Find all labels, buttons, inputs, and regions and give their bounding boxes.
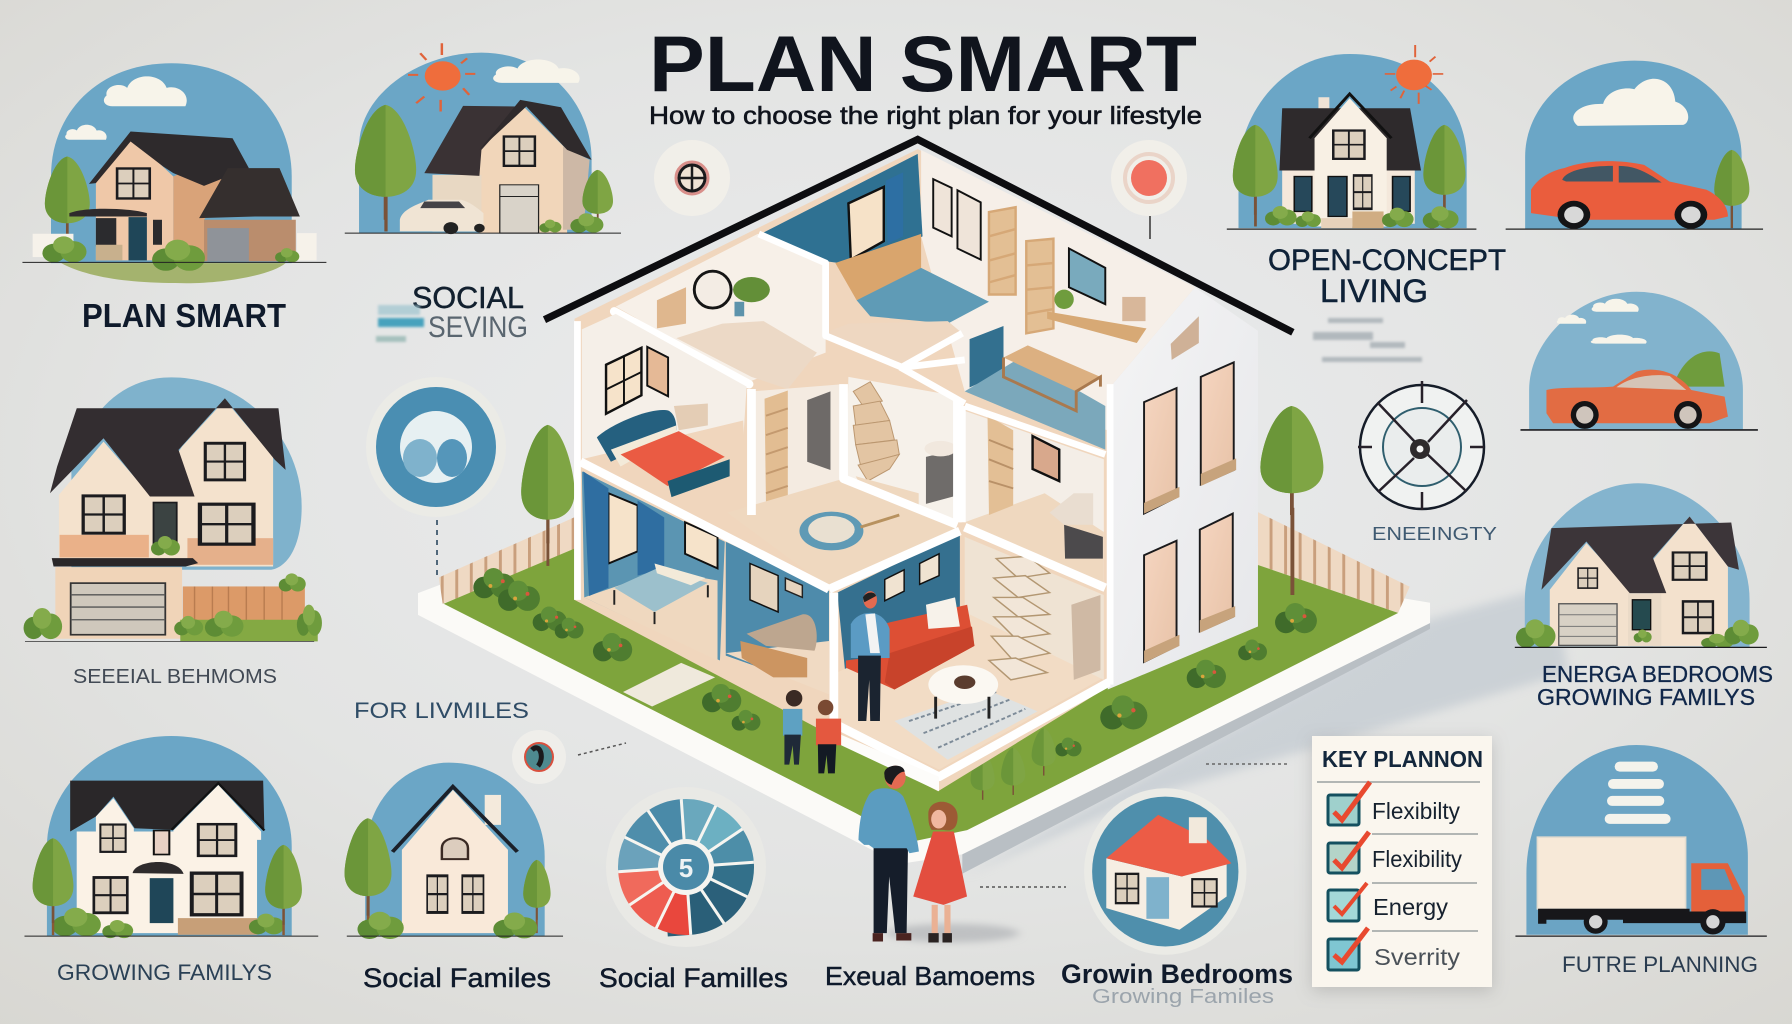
car body xyxy=(1531,161,1728,220)
house base xyxy=(575,149,1195,791)
panel: Plan Smart house xyxy=(22,63,326,283)
walls xyxy=(1550,517,1728,646)
garage side xyxy=(432,175,481,231)
porch shrub xyxy=(151,536,180,555)
night table xyxy=(674,404,708,430)
window xyxy=(504,137,535,166)
arched window xyxy=(442,838,468,859)
icon: energy dial xyxy=(1358,381,1484,510)
gables xyxy=(96,783,264,840)
pictures xyxy=(885,554,939,601)
icon: segmented wheel: 5 xyxy=(679,853,693,883)
label: living: LIVING xyxy=(1320,273,1428,309)
middle floor centre rooms xyxy=(727,377,960,588)
label: social familes: Social Familes xyxy=(363,963,551,993)
roof xyxy=(70,781,264,832)
row 1: Flexibilty xyxy=(1372,798,1460,824)
sun xyxy=(1385,45,1443,104)
trees xyxy=(33,838,302,935)
man in blue jacket xyxy=(851,591,890,721)
walls xyxy=(77,832,257,933)
upper floor right room xyxy=(921,150,1195,450)
cab window xyxy=(1701,869,1733,890)
trees xyxy=(345,818,551,933)
roof xyxy=(424,106,520,176)
man xyxy=(858,766,919,941)
left fence xyxy=(439,515,579,604)
icon: window badge xyxy=(654,140,730,216)
window xyxy=(606,348,641,414)
windows xyxy=(1116,874,1217,919)
canopy xyxy=(52,558,198,566)
picture xyxy=(1033,436,1059,481)
car windows xyxy=(1562,166,1662,182)
middle floor right room xyxy=(965,411,1104,588)
ground line xyxy=(25,640,314,642)
gable xyxy=(1315,98,1387,226)
bench xyxy=(835,234,921,300)
right fence xyxy=(1258,512,1410,613)
upper windows xyxy=(1144,362,1236,514)
floor xyxy=(824,321,962,365)
panel: Social families house xyxy=(345,763,563,939)
front base step xyxy=(837,733,939,791)
fences xyxy=(33,233,317,260)
bush xyxy=(1673,351,1725,387)
garage door xyxy=(1559,604,1617,645)
title: PLAN SMART xyxy=(649,19,1197,108)
windows xyxy=(1578,552,1713,633)
panel: yard and slab under the main house xyxy=(418,406,1568,876)
roof xyxy=(50,398,286,497)
red roof xyxy=(1106,815,1231,877)
house body xyxy=(96,137,173,260)
bed end xyxy=(668,459,730,497)
wood stair ladder xyxy=(765,390,788,505)
faded caption lines xyxy=(1313,318,1422,362)
round rug xyxy=(799,512,863,550)
label: growing familes faded: Growing Familes xyxy=(1092,986,1274,1008)
row 3 xyxy=(1328,883,1449,921)
pillow xyxy=(611,425,676,467)
wood fence xyxy=(183,586,305,621)
slab xyxy=(418,532,1430,864)
label: future planning: FUTRE PLANNING xyxy=(1562,952,1758,977)
shrubs xyxy=(473,568,1317,756)
sky blob xyxy=(1525,483,1750,647)
curtains xyxy=(583,471,608,596)
label: for livmiles: FOR LIVMILES xyxy=(354,698,529,723)
row 4: Sverrity xyxy=(1374,944,1461,970)
row 1 xyxy=(1328,782,1460,825)
chimney xyxy=(1318,97,1329,122)
ground line xyxy=(1506,227,1763,231)
panel: open-concept house xyxy=(1227,45,1476,229)
tree xyxy=(45,157,90,240)
lower walls xyxy=(1282,170,1415,224)
upper floor blue room xyxy=(764,154,989,365)
plant and ornaments xyxy=(1054,290,1146,321)
garage door xyxy=(207,228,249,261)
label: growing families left: GROWING FAMILYS xyxy=(57,960,272,985)
door xyxy=(133,862,184,923)
couch xyxy=(747,614,817,651)
car xyxy=(400,200,485,234)
dotted connector right xyxy=(1206,763,1288,765)
label: exeual bamoems: Exeual Bamoems xyxy=(825,961,1035,991)
roof xyxy=(1541,517,1739,593)
middle floor left room with bed xyxy=(582,314,747,532)
roof xyxy=(1279,108,1421,170)
sky blob xyxy=(365,763,545,936)
icon: red dot badge xyxy=(1111,140,1187,239)
sky blob xyxy=(47,736,292,936)
floating stairs xyxy=(989,556,1050,680)
vanity xyxy=(924,441,956,504)
walls xyxy=(59,400,273,566)
house wall xyxy=(479,103,567,233)
row 2: Flexibility xyxy=(1372,846,1462,872)
striped rug xyxy=(894,690,1037,760)
shrubs xyxy=(24,573,322,639)
trees xyxy=(1233,125,1465,226)
round mirror xyxy=(694,271,731,308)
label: energy: ENEEINGTY xyxy=(1372,524,1497,544)
wheels xyxy=(1584,909,1726,934)
row 2 xyxy=(1328,832,1462,873)
panel: Special bedrooms house xyxy=(24,377,322,641)
lawn xyxy=(180,620,318,641)
ground line xyxy=(1515,645,1767,649)
sky blob xyxy=(359,53,592,233)
icon: big blue badge xyxy=(366,377,506,575)
row 4 xyxy=(1328,928,1461,970)
floor xyxy=(676,321,817,389)
exterior right wall xyxy=(1108,287,1258,690)
chimney xyxy=(485,795,501,825)
shelf xyxy=(657,287,686,328)
right back tree xyxy=(1260,406,1323,595)
lower floor living room xyxy=(837,533,1104,769)
icon: growing house badge xyxy=(1084,788,1246,955)
chassis xyxy=(1538,909,1746,924)
stacked lines icon xyxy=(1605,762,1671,824)
card title: KEY PLANNON xyxy=(1322,746,1483,772)
ground line xyxy=(24,935,318,938)
bedspread xyxy=(621,431,725,486)
upper window xyxy=(117,168,150,198)
label: energy bedrooms: ENERGA BEDROOMS xyxy=(1542,661,1773,687)
walkway xyxy=(623,663,715,706)
clouds xyxy=(1557,299,1647,344)
blue cabinet xyxy=(970,326,1004,388)
label: special bedrooms: SEEEIAL BEHMOMS xyxy=(73,666,277,688)
main cutaway house xyxy=(544,139,1293,791)
icon: segmented wheel xyxy=(606,787,766,947)
sky blob xyxy=(51,63,292,263)
shrubs and stones xyxy=(52,908,284,938)
clouds xyxy=(493,60,580,83)
cut wall edge xyxy=(614,311,749,384)
sky blob xyxy=(1526,745,1748,935)
shrubs xyxy=(357,912,537,939)
car body xyxy=(1546,370,1728,423)
panel: Social saving house xyxy=(345,43,621,234)
picture xyxy=(647,347,668,396)
windows xyxy=(1294,131,1410,216)
doorway xyxy=(807,391,830,470)
porch xyxy=(69,209,162,260)
sky blob xyxy=(1525,61,1742,229)
bed xyxy=(614,564,708,624)
main roof xyxy=(89,132,249,186)
label: growin bedrooms: Growin Bedrooms xyxy=(1061,959,1293,989)
slab side shade xyxy=(962,623,1430,874)
headboard xyxy=(597,410,676,462)
tree xyxy=(355,105,416,231)
window xyxy=(685,522,718,568)
stairs xyxy=(853,382,899,481)
wood shelves xyxy=(989,207,1053,333)
car window xyxy=(1616,375,1686,390)
small cypress trees xyxy=(971,728,1056,800)
wall pictures xyxy=(933,179,1105,304)
ground shadow xyxy=(887,924,1019,942)
label: growing families right: GROWING FAMILYS xyxy=(1537,684,1755,710)
shrubs xyxy=(42,236,299,271)
clouds xyxy=(65,76,187,140)
subtitle: How to choose the right plan for your lifestyle xyxy=(649,102,1202,130)
roof xyxy=(544,139,1293,332)
round table xyxy=(928,665,998,719)
cushion xyxy=(926,597,960,629)
steps and stone xyxy=(1321,211,1384,228)
curtain xyxy=(886,172,903,244)
lawn xyxy=(444,547,1398,842)
icon: small pin badge xyxy=(512,730,626,784)
lower floor left room xyxy=(582,471,725,660)
truck box xyxy=(1537,837,1686,909)
label: social: SOCIAL xyxy=(412,280,524,315)
pictures xyxy=(750,564,802,612)
panel: Growing families house xyxy=(24,736,318,938)
sky blob xyxy=(1529,292,1743,429)
windows xyxy=(83,443,253,546)
tree xyxy=(1714,150,1749,228)
windows xyxy=(94,824,242,915)
girl xyxy=(913,802,967,942)
wheels xyxy=(1571,401,1702,429)
garage door xyxy=(71,583,165,635)
children xyxy=(783,690,841,773)
brick band xyxy=(60,535,273,565)
garage door xyxy=(500,185,539,233)
central partition xyxy=(759,234,962,367)
label: social familles: Social Familles xyxy=(599,963,788,993)
panel: Energy bedrooms house xyxy=(1515,483,1767,648)
panel: red car xyxy=(1506,61,1763,229)
cloud xyxy=(1573,79,1688,126)
shrubs and small tree xyxy=(539,170,613,233)
desk xyxy=(740,641,807,677)
panel: moving truck xyxy=(1515,745,1767,936)
ground line xyxy=(22,261,326,264)
chair xyxy=(1071,595,1100,680)
sun xyxy=(408,43,475,112)
window xyxy=(608,493,638,564)
ground line xyxy=(1520,427,1758,432)
gable vent xyxy=(1171,316,1199,360)
blue carpet xyxy=(857,268,989,324)
ground line xyxy=(1515,934,1767,938)
floor plate edges xyxy=(580,462,1109,777)
garage wall xyxy=(55,567,182,639)
label: saving: SEVING xyxy=(428,311,528,344)
wall xyxy=(402,790,508,933)
lawn xyxy=(61,263,286,283)
house walls xyxy=(1106,858,1227,930)
ground line xyxy=(1227,227,1476,231)
truck cab xyxy=(1691,863,1745,911)
chimney xyxy=(1189,817,1207,843)
figure: couple standing in front xyxy=(858,766,1019,942)
checklist card xyxy=(1312,736,1492,987)
slab shadow xyxy=(962,585,1568,876)
label: plan smart: PLAN SMART xyxy=(82,297,286,334)
window xyxy=(848,187,884,260)
outer wall edges xyxy=(577,321,1110,685)
roof edge xyxy=(392,787,517,852)
ground line xyxy=(345,232,621,235)
dotted connector xyxy=(980,886,1066,888)
upper floor left room xyxy=(614,234,826,389)
plant xyxy=(733,277,770,316)
windows xyxy=(427,876,483,912)
stair xyxy=(988,416,1013,515)
label: open-concept living: OPEN-CONCEPT xyxy=(1268,244,1506,277)
panel: orange coupe xyxy=(1520,292,1758,430)
wood table xyxy=(1004,345,1100,411)
garage roof xyxy=(199,168,300,218)
sky blob xyxy=(71,377,302,570)
red sofa xyxy=(846,605,974,690)
smudged legend xyxy=(376,305,424,342)
garage body xyxy=(204,220,296,261)
lower windows xyxy=(1144,514,1235,663)
shrubs xyxy=(1265,206,1459,228)
wall desk shelf xyxy=(1047,311,1146,343)
console xyxy=(1050,493,1103,559)
blue carpet xyxy=(965,358,1105,450)
lower floor study xyxy=(726,542,829,694)
row 3: Energy xyxy=(1373,894,1449,920)
wheels xyxy=(1558,201,1707,229)
left back tree xyxy=(521,425,575,566)
walls xyxy=(751,384,957,525)
ground line xyxy=(347,935,563,938)
shrubs xyxy=(1516,619,1759,648)
floor xyxy=(727,479,960,588)
sky blob xyxy=(1238,54,1467,228)
